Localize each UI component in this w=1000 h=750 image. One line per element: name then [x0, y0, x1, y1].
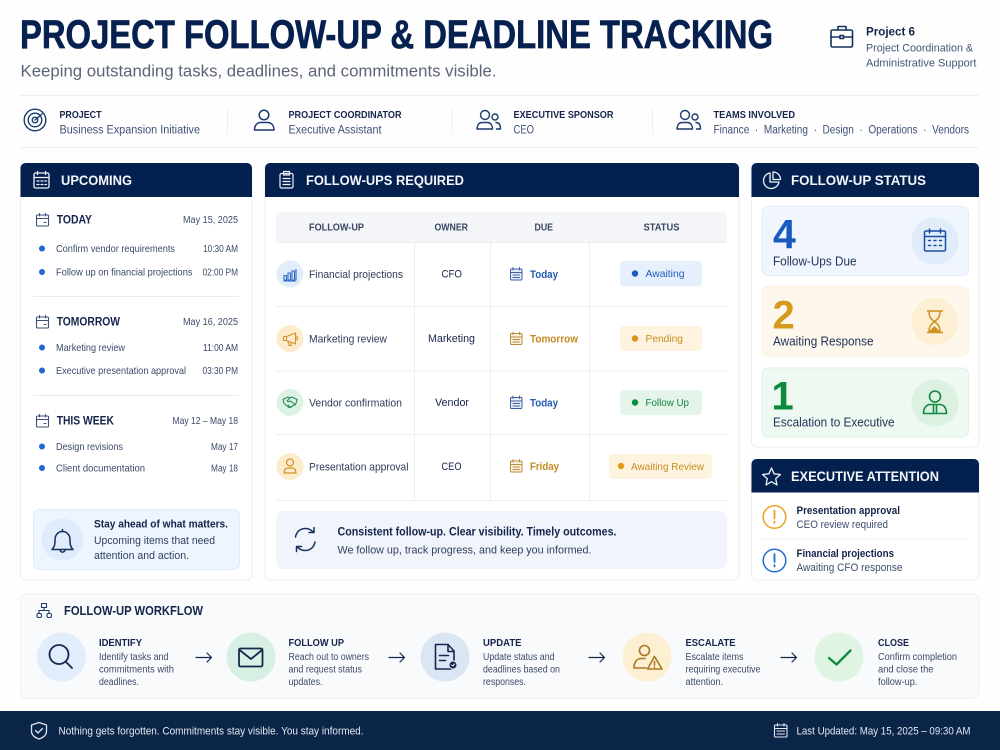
upcoming header: UPCOMING — [61, 173, 132, 188]
step: identify: deadlines. — [99, 677, 139, 688]
group: tomorrow: Marketing review — [56, 342, 125, 354]
workflow heading: FOLLOW-UP WORKFLOW — [64, 604, 203, 618]
project badge: Administrative Support — [866, 58, 976, 70]
row: vendor confirmation: Today — [530, 398, 559, 410]
step: identify — [37, 632, 174, 688]
stat card: follow-ups due — [762, 206, 968, 276]
group: tomorrow: TOMORROW — [57, 316, 120, 328]
icon: megaphone — [284, 333, 298, 346]
group: this week: THIS WEEK — [57, 416, 115, 428]
icon: person — [254, 110, 274, 130]
group: today: Follow up on financial projections — [56, 266, 192, 278]
callout: stay ahead — [34, 510, 240, 570]
icon: bell — [52, 530, 73, 552]
step: update: Update status and — [483, 652, 554, 663]
project badge: Project 6 — [866, 24, 915, 38]
attention header: EXECUTIVE ATTENTION — [791, 469, 939, 484]
info strip: project coordinator: PROJECT COORDINATOR — [288, 110, 402, 121]
step: update: UPDATE — [483, 637, 522, 649]
step: identify: IDENTIFY — [99, 637, 142, 649]
step: follow up: FOLLOW UP — [288, 637, 344, 649]
callout: stay ahead: Stay ahead of what matters. — [94, 518, 228, 530]
icon: calendar — [774, 724, 787, 737]
group: this week: Client documentation — [56, 462, 145, 474]
info strip: executive sponsor — [477, 110, 614, 136]
info strip: project: Business Expansion Initiative — [60, 124, 200, 136]
step: identify: commitments with — [99, 664, 174, 676]
panel: follow-up status — [752, 163, 979, 447]
group: today: 02:00 PM — [202, 268, 238, 278]
item: financial projections: Awaiting CFO response — [796, 562, 902, 574]
icon: bar chart — [284, 269, 296, 281]
item: presentation approval — [763, 505, 900, 531]
row: vendor confirmation: Vendor confirmation — [309, 398, 402, 410]
status header — [752, 163, 979, 197]
stat card: follow-ups due: Follow-Ups Due — [773, 254, 857, 268]
footer bar — [0, 711, 1000, 750]
icon: briefcase — [831, 26, 852, 47]
icon: org chart — [37, 604, 52, 618]
step: update: responses. — [483, 677, 526, 688]
icon: person — [284, 459, 296, 473]
step: follow up: and request status — [288, 664, 362, 676]
group: tomorrow: 11:00 AM — [203, 343, 238, 354]
panel: executive attention — [752, 459, 979, 580]
step: follow up: updates. — [288, 677, 322, 688]
banner: consistent follow-up — [276, 511, 727, 569]
stat card: awaiting response — [762, 286, 968, 356]
upcoming header — [20, 163, 252, 197]
stat card: escalation to executive — [762, 368, 968, 437]
row: financial projections: Awaiting — [646, 268, 685, 280]
row: marketing review — [276, 325, 702, 352]
group: tomorrow: May 16, 2025 — [183, 317, 238, 328]
table header: DUE — [534, 222, 553, 234]
arrow — [389, 653, 404, 662]
stat card: escalation to executive: Escalation to Executive — [773, 416, 895, 430]
step: escalate — [622, 632, 761, 688]
icon: refresh — [296, 528, 315, 552]
subtitle: Keeping outstanding tasks, deadlines, and commitments visible. — [20, 62, 496, 80]
icon: check — [829, 650, 850, 664]
arrow — [196, 653, 212, 662]
group: today: TODAY — [57, 214, 92, 226]
table header: STATUS — [644, 222, 680, 234]
stat card: awaiting response: Awaiting Response — [773, 334, 874, 348]
icon: clipboard — [280, 172, 293, 188]
row: vendor confirmation: Follow Up — [646, 397, 689, 409]
row: financial projections: Today — [530, 269, 559, 281]
project badge: Project Coordination & — [866, 42, 974, 54]
panel: follow-ups required — [265, 163, 739, 580]
icon: handshake — [283, 397, 297, 408]
item: presentation approval: CEO review required — [796, 519, 888, 531]
icon: people — [677, 110, 700, 129]
item: financial projections — [763, 548, 902, 574]
row: presentation approval: CEO — [442, 461, 462, 473]
group: tomorrow — [36, 316, 238, 377]
info strip: project coordinator — [254, 110, 402, 136]
item: presentation approval: Presentation approval — [796, 505, 900, 517]
status header: FOLLOW-UP STATUS — [791, 173, 926, 188]
panel: upcoming — [20, 163, 252, 580]
step: escalate: requiring executive — [686, 664, 761, 676]
step: identify: Identify tasks and — [99, 652, 168, 663]
banner: consistent follow-up: Consistent follow-up. Clear visibility. Timely outcomes. — [338, 526, 616, 538]
step: follow up — [226, 632, 369, 688]
callout: stay ahead: attention and action. — [94, 550, 189, 562]
icon: executive — [924, 391, 946, 414]
row: financial projections: Financial projections — [309, 269, 403, 281]
info strip: teams involved — [677, 110, 969, 136]
row: presentation approval: Friday — [530, 461, 560, 473]
group: this week: May 17 — [211, 442, 238, 453]
arrow — [781, 653, 796, 662]
callout: stay ahead: Upcoming items that need — [94, 535, 215, 547]
table header: FOLLOW-UP — [309, 222, 364, 234]
banner: consistent follow-up: We follow up, track progress, and keep you informed. — [338, 544, 592, 556]
group: tomorrow: 03:30 PM — [202, 366, 238, 377]
footer bar: Nothing gets forgotten. Commitments stay visible. You stay informed. — [58, 726, 364, 738]
icon: hourglass — [927, 311, 943, 332]
icon: shield — [32, 722, 46, 739]
info strip: executive sponsor: CEO — [514, 124, 534, 136]
step: follow up: Reach out to owners — [288, 652, 369, 663]
step: close — [814, 632, 957, 688]
icon: calendar — [34, 172, 49, 188]
row: marketing review: Tomorrow — [530, 334, 578, 346]
row: marketing review: Marketing review — [309, 334, 387, 346]
stat card: follow-ups due: 4 — [773, 211, 796, 257]
group: this week: May 18 — [211, 464, 238, 474]
row: presentation approval: Presentation approval — [309, 462, 408, 474]
item: financial projections: Financial projections — [796, 548, 894, 560]
row: marketing review: Marketing — [428, 333, 475, 345]
info strip: project: PROJECT — [60, 110, 102, 121]
icon: people — [477, 110, 500, 129]
icon: magnifier — [50, 645, 72, 668]
group: this week: May 12 – May 18 — [172, 416, 238, 427]
step: escalate: attention. — [686, 677, 723, 688]
arrow — [589, 653, 604, 662]
info strip: executive sponsor: EXECUTIVE SPONSOR — [514, 110, 614, 121]
icon: person warning — [634, 646, 662, 669]
group: today: May 15, 2025 — [183, 215, 238, 226]
attention header — [752, 459, 979, 492]
group: today: Confirm vendor requirements — [56, 243, 175, 255]
group: tomorrow: Executive presentation approval — [56, 365, 186, 377]
info strip: project — [24, 109, 200, 136]
step: escalate: Escalate items — [686, 652, 744, 663]
group: this week — [36, 414, 238, 474]
row: vendor confirmation — [276, 389, 702, 416]
group: this week: Design revisions — [56, 441, 123, 453]
step: escalate: ESCALATE — [686, 637, 736, 649]
info strip: teams involved: TEAMS INVOLVED — [714, 110, 795, 121]
follow-ups header: FOLLOW-UPS REQUIRED — [306, 173, 464, 188]
icon: envelope — [239, 648, 262, 666]
step: close: CLOSE — [878, 637, 909, 649]
project badge — [831, 24, 976, 70]
panel: follow-up workflow — [20, 594, 979, 698]
group: today — [36, 214, 238, 278]
row: marketing review: Pending — [646, 333, 683, 345]
step: close: follow-up. — [878, 677, 918, 688]
group: today: 10:30 AM — [203, 244, 238, 255]
icon: calendar — [924, 229, 946, 251]
title: PROJECT FOLLOW-UP & DEADLINE TRACKING — [20, 13, 773, 57]
icon: star — [763, 468, 780, 485]
follow-ups header — [265, 163, 739, 197]
row: financial projections — [276, 260, 702, 288]
row: presentation approval: Awaiting Review — [631, 461, 704, 473]
stat card: awaiting response: 2 — [772, 294, 795, 338]
info strip: project coordinator: Executive Assistant — [288, 124, 382, 136]
footer bar: Last Updated: May 15, 2025 – 09:30 AM — [796, 726, 970, 738]
step: update: deadlines based on — [483, 664, 560, 676]
row: financial projections: CFO — [442, 268, 462, 280]
icon: target — [24, 109, 46, 131]
stat card: escalation to executive: 1 — [772, 374, 794, 418]
icon: document — [436, 644, 457, 669]
step: update — [420, 632, 560, 688]
step: close: Confirm completion — [878, 652, 957, 663]
icon: pie chart — [764, 172, 780, 188]
step: close: and close the — [878, 664, 934, 676]
row: vendor confirmation: Vendor — [435, 397, 469, 409]
table header — [276, 212, 727, 242]
table header: OWNER — [434, 222, 469, 234]
info strip: teams involved: Finance · Marketing · Design · Operations · Vendors — [714, 124, 969, 136]
row: presentation approval — [276, 453, 712, 480]
